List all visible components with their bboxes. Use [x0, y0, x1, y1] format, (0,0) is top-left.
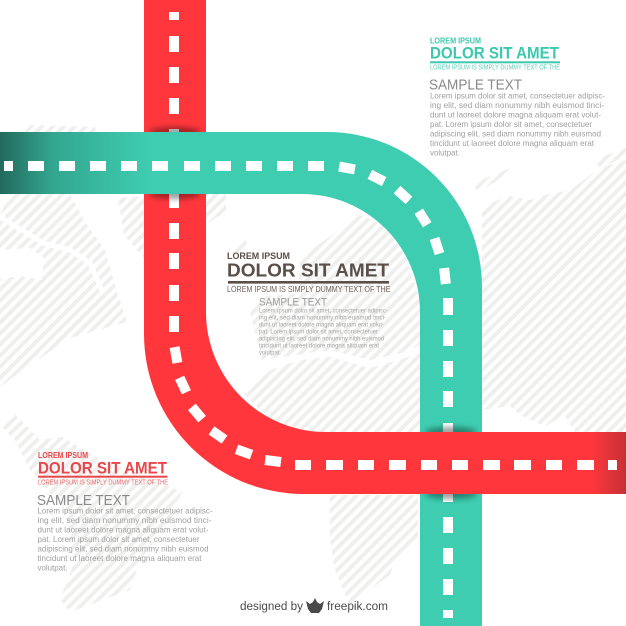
body text: tincidunt ut laoreet dolore magna aliquam erat	[430, 138, 595, 148]
body text: adipiscing elit, sed diam nonummy nibh euismod	[38, 544, 209, 554]
text block: brown centre	[227, 251, 391, 357]
body text: adipiscing elit, sed diam nonummy nibh euismod	[430, 128, 601, 138]
body text	[259, 308, 388, 357]
teal upper lane dashes	[4, 161, 453, 377]
shadows of red road on teal road	[425, 427, 477, 499]
footer credit	[240, 598, 388, 613]
body text: volutpat.	[38, 562, 68, 572]
sample text heading: SAMPLE TEXT	[37, 492, 130, 509]
brown small heading: LOREM IPSUM	[227, 251, 290, 262]
body text: volutpat.	[430, 148, 460, 158]
body text: volutpat.	[259, 350, 281, 357]
sample text heading: SAMPLE TEXT	[259, 297, 327, 309]
icon: crown	[306, 598, 324, 613]
sample text heading: SAMPLE TEXT	[429, 76, 522, 93]
teal lower lane dashes	[443, 391, 453, 618]
body text: tincidunt ut laoreet dolore magna aliquam erat	[38, 553, 202, 563]
body text: dunt ut laoreet dolore magna aliquam erat volut-	[430, 110, 601, 120]
body text: tincidunt ut laoreet dolore magna aliquam erat	[259, 343, 379, 350]
shadows of teal road on red road	[149, 127, 201, 199]
red lane dashes	[169, 12, 617, 470]
body text: pat. Lorem ipsum dolor sit amet, consectetuer	[430, 119, 592, 129]
teal small heading: LOREM IPSUM	[430, 35, 481, 45]
brown subheading: LOREM IPSUM IS SIMPLY DUMMY TEXT OF THE	[227, 284, 391, 294]
teal main heading: DOLOR SIT AMET	[430, 43, 560, 62]
body text: Lorem ipsum dolor sit amet, consectetuer adipisc-	[430, 90, 605, 100]
teal road: lower section	[420, 384, 482, 626]
teal road: upper section	[0, 132, 482, 384]
body text: pat. Lorem ipsum dolor sit amet, consectetuer	[259, 329, 378, 336]
text block: teal top right	[429, 35, 605, 157]
body text: ing elit, sed diam nonummy nibh euismod tinci-	[430, 100, 604, 110]
body text: Lorem ipsum dolor sit amet, consectetuer adipisc-	[38, 505, 213, 515]
brown main heading: DOLOR SIT AMET	[227, 261, 389, 281]
red road	[144, 0, 626, 494]
body text: adipiscing elit, sed diam nonummy nibh euismod	[259, 336, 385, 343]
freepik.com: freepik.com	[327, 601, 388, 613]
text block: red bottom left	[37, 450, 213, 572]
body text: dunt ut laoreet dolore magna aliquam erat volut-	[259, 322, 384, 329]
red small heading: LOREM IPSUM	[38, 450, 88, 460]
body text: Lorem ipsum dolor sit amet, consectetuer adipisc-	[259, 308, 388, 315]
designed by: designed by	[240, 601, 303, 613]
body text: ing elit, sed diam nonummy nibh euismod tinci-	[38, 515, 212, 525]
brown rule	[228, 281, 389, 284]
body text	[38, 505, 213, 572]
body text: ing elit, sed diam nonummy nibh euismod tinci-	[259, 315, 386, 322]
red main heading: DOLOR SIT AMET	[38, 458, 168, 477]
red rule	[38, 476, 168, 478]
red subheading: LOREM IPSUM IS SIMPLY DUMMY TEXT OF THE	[38, 479, 168, 486]
teal rule	[430, 61, 560, 63]
teal subheading: LOREM IPSUM IS SIMPLY DUMMY TEXT OF THE	[430, 64, 560, 71]
background world map	[0, 125, 626, 612]
body text: pat. Lorem ipsum dolor sit amet, consectetuer	[38, 534, 200, 544]
body text: dunt ut laoreet dolore magna aliquam erat volut-	[38, 524, 209, 534]
body text	[430, 90, 605, 158]
